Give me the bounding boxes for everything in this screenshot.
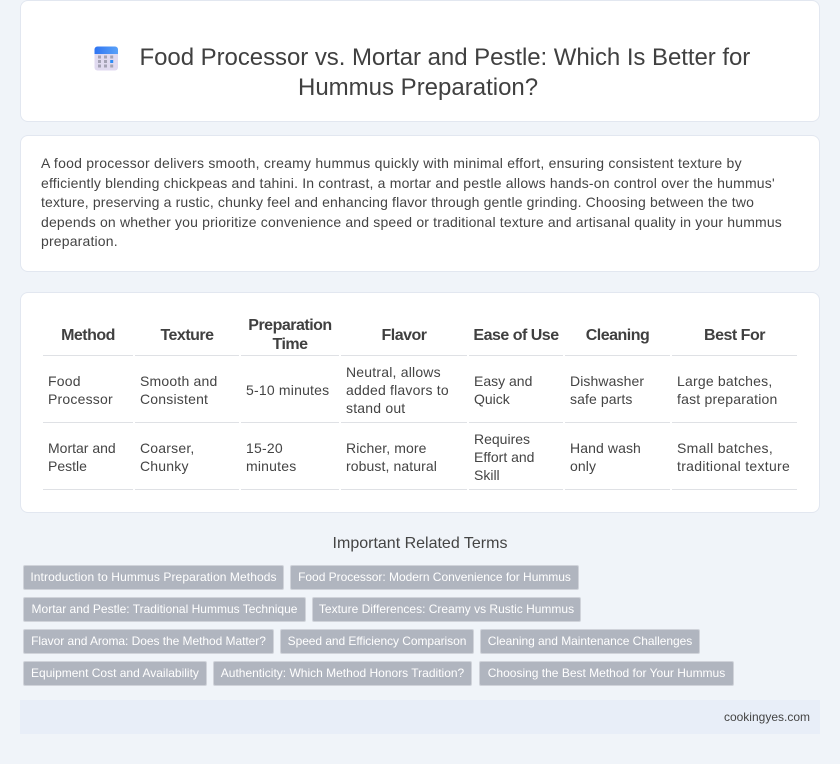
tag: Flavor and Aroma: Does the Method Matter?: [31, 634, 266, 648]
row: mortar and pestle: Effort and: [474, 449, 534, 465]
row: mortar and pestle: Hand wash: [570, 440, 641, 456]
tag: Speed and Efficiency Comparison: [288, 634, 466, 648]
tag: Cleaning and Maintenance Challenges: [488, 634, 692, 648]
tag: [23, 661, 207, 686]
title: [140, 44, 750, 101]
footer source text: cookingyes.com: [724, 710, 810, 724]
row: mortar and pestle: Mortar and: [48, 440, 116, 456]
table header row: Method: [61, 327, 115, 344]
header panel: [20, 0, 820, 122]
row: food processor: Easy and: [474, 373, 532, 389]
tag: [312, 597, 581, 622]
row: food processor: fast preparation: [677, 391, 777, 407]
row: mortar and pestle: Requires: [474, 431, 530, 447]
row: food processor: Smooth and: [140, 373, 218, 389]
tag: [23, 565, 284, 590]
row: food processor: 5-10 minutes: [246, 382, 329, 398]
row: food processor: Consistent: [140, 391, 208, 407]
row: food processor: Processor: [48, 391, 113, 407]
row: food processor: Neutral, allows: [346, 364, 441, 380]
row: mortar and pestle: Coarser,: [140, 440, 195, 456]
row: mortar and pestle: Pestle: [48, 458, 87, 474]
tag: [213, 661, 472, 686]
tag: [480, 629, 700, 654]
row: mortar and pestle: 15-20: [246, 440, 283, 456]
table header row: Time: [272, 336, 308, 353]
row: food processor: added flavors to: [346, 382, 449, 398]
row: mortar and pestle: robust, natural: [346, 458, 437, 474]
row: mortar and pestle: traditional texture: [677, 458, 790, 474]
tag: Food Processor: Modern Convenience for Hummus: [298, 570, 571, 584]
row: food processor: Food: [48, 373, 81, 389]
intro paragraph: preparation.: [41, 233, 118, 249]
tag: [290, 565, 579, 590]
icon: calendar: [94, 46, 118, 70]
tag: Authenticity: Which Method Honors Tradition?: [221, 666, 464, 680]
row: food processor: stand out: [346, 400, 405, 416]
table header row: [61, 317, 766, 353]
table header row: Ease of Use: [473, 327, 559, 344]
tag: Choosing the Best Method for Your Hummus: [488, 666, 725, 680]
tag: Introduction to Hummus Preparation Methods: [30, 570, 277, 584]
tag: [23, 597, 306, 622]
table header row: Texture: [160, 327, 214, 344]
comparison table: [43, 317, 797, 490]
related terms heading: Important Related Terms: [333, 534, 507, 552]
intro paragraph: efficiently blending chickpeas and tahini. In contrast, a mortar and pestle allows hands-on control over the hummus': [41, 174, 775, 190]
comparison table panel: [20, 292, 820, 513]
tag: Equipment Cost and Availability: [31, 666, 199, 680]
row: food processor: Dishwasher: [570, 373, 644, 389]
tag: [479, 661, 734, 686]
tag: Mortar and Pestle: Traditional Hummus Technique: [32, 602, 297, 616]
intro text panel: [20, 135, 820, 272]
intro paragraph: [41, 155, 782, 249]
footer bar: [20, 700, 820, 734]
row: mortar and pestle: Chunky: [140, 458, 189, 474]
title: Hummus Preparation?: [298, 74, 538, 101]
row: food processor: Large batches,: [677, 373, 772, 389]
tag: [280, 629, 474, 654]
row: food processor: safe parts: [570, 391, 632, 407]
table header row: Cleaning: [586, 327, 649, 344]
table header row: Preparation: [248, 317, 332, 334]
tag: Texture Differences: Creamy vs Rustic Hummus: [319, 602, 574, 616]
row: mortar and pestle: [48, 431, 790, 483]
row: food processor: Quick: [474, 391, 510, 407]
title: Food Processor vs. Mortar and Pestle: Which Is Better for: [140, 44, 750, 71]
row: mortar and pestle: Skill: [474, 467, 500, 483]
tag: [23, 629, 274, 654]
row: mortar and pestle: Small batches,: [677, 440, 773, 456]
row: mortar and pestle: Richer, more: [346, 440, 427, 456]
row: food processor: [48, 364, 777, 416]
table header row: Flavor: [381, 327, 426, 344]
related terms tags: [23, 565, 734, 686]
table header row: Best For: [704, 327, 765, 344]
intro paragraph: A food processor delivers smooth, creamy hummus quickly with minimal effort, ensuring consistent texture by: [41, 155, 742, 171]
intro paragraph: texture, preserving a rustic, chunky feel and enhancing flavor through gentle grinding. Choosing between the two: [41, 194, 754, 210]
row: mortar and pestle: minutes: [246, 458, 296, 474]
row: mortar and pestle: only: [570, 458, 596, 474]
intro paragraph: depends on whether you prioritize convenience and speed or traditional texture and artisanal quality in your hummus: [41, 214, 782, 230]
